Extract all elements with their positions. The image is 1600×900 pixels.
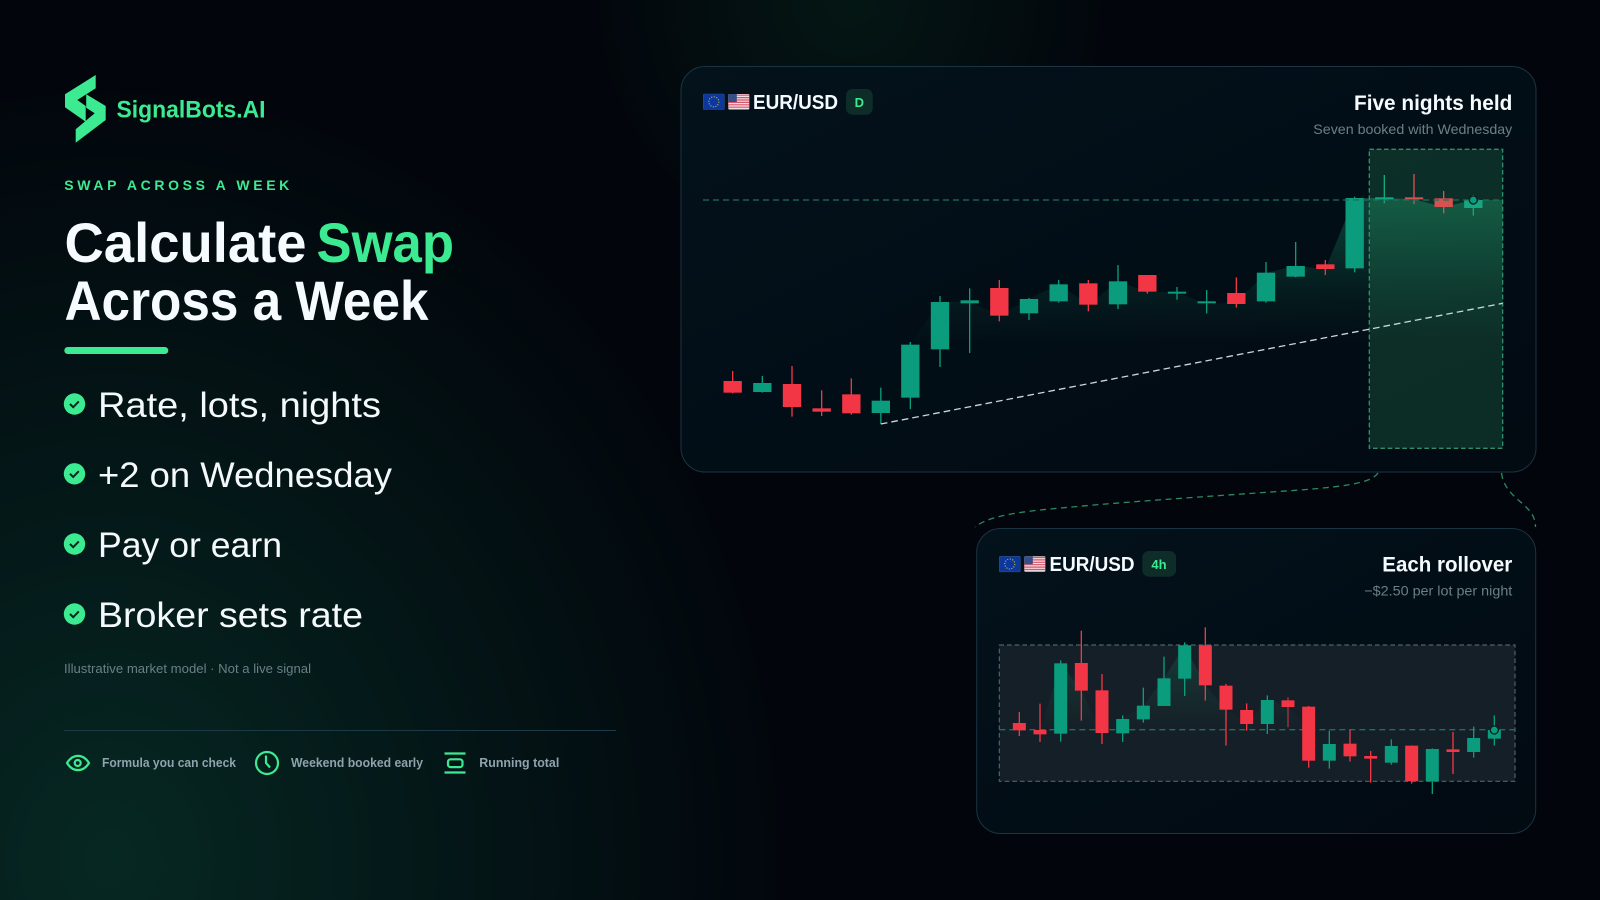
title underline bbox=[64, 347, 168, 354]
panel: daily chart bbox=[681, 66, 1536, 472]
candlestick chart: 4h bbox=[999, 627, 1515, 794]
icon: S mark bbox=[65, 75, 106, 143]
label: weekend: Weekend booked early bbox=[291, 756, 423, 770]
title: Across a Week bbox=[64, 269, 429, 332]
price area bbox=[1019, 645, 1309, 734]
panel title: Five nights held bbox=[1354, 91, 1512, 115]
item: pay or earn: Pay or earn bbox=[98, 526, 282, 565]
timeframe badge: D bbox=[855, 95, 864, 110]
checklist bbox=[64, 386, 393, 635]
item: broker sets rate: Broker sets rate bbox=[98, 596, 363, 635]
range box bbox=[999, 645, 1515, 781]
item: +2 on Wednesday: +2 on Wednesday bbox=[98, 456, 393, 495]
brand name: SignalBots.AI bbox=[116, 97, 266, 124]
title: Swap bbox=[316, 211, 454, 274]
panel subtitle: Seven booked with Wednesday bbox=[1313, 121, 1512, 137]
candlestick chart: daily bbox=[703, 149, 1503, 448]
pair label: EUR/USD bbox=[1050, 554, 1134, 576]
connector arrows bbox=[975, 473, 1536, 527]
panel background bbox=[681, 66, 1536, 472]
eyebrow: SWAP ACROSS A WEEK bbox=[64, 177, 289, 193]
title bbox=[64, 211, 454, 332]
disclaimer note: Illustrative market model · Not a live signal bbox=[64, 661, 311, 676]
panel title: Each rollover bbox=[1382, 552, 1513, 576]
label: running total: Running total bbox=[479, 756, 559, 770]
label: formula: Formula you can check bbox=[102, 756, 236, 770]
panel subtitle: −$2.50 per lot per night bbox=[1364, 582, 1512, 598]
highlight box: five nights bbox=[1369, 149, 1503, 448]
timeframe badge bbox=[846, 89, 873, 115]
icon: US flag bbox=[728, 94, 749, 110]
timeframe badge bbox=[1142, 551, 1176, 577]
icon: running total bbox=[444, 754, 466, 772]
level line bbox=[999, 728, 1515, 732]
icon: US flag bbox=[1024, 556, 1045, 572]
pair label: EUR/USD bbox=[753, 92, 838, 114]
candles bbox=[723, 174, 1482, 424]
item: rate, lots, nights: Rate, lots, nights bbox=[98, 386, 381, 425]
current price dot bbox=[1469, 196, 1477, 204]
panel background bbox=[977, 528, 1536, 834]
panel: 4h chart bbox=[977, 528, 1536, 834]
icon: EU flag bbox=[999, 556, 1020, 572]
logo bbox=[65, 75, 266, 143]
icon: clock bbox=[256, 752, 278, 774]
level line bbox=[703, 198, 1503, 202]
candles bbox=[1013, 627, 1501, 794]
icon: EU flag bbox=[703, 94, 724, 110]
current price dot bbox=[1490, 726, 1498, 734]
footer divider bbox=[64, 730, 616, 731]
trend line bbox=[881, 303, 1503, 424]
price area bbox=[733, 198, 1503, 448]
timeframe badge: 4h bbox=[1151, 557, 1167, 572]
title: Calculate bbox=[64, 211, 306, 274]
icon: eye bbox=[67, 756, 89, 770]
footer items bbox=[67, 752, 559, 774]
